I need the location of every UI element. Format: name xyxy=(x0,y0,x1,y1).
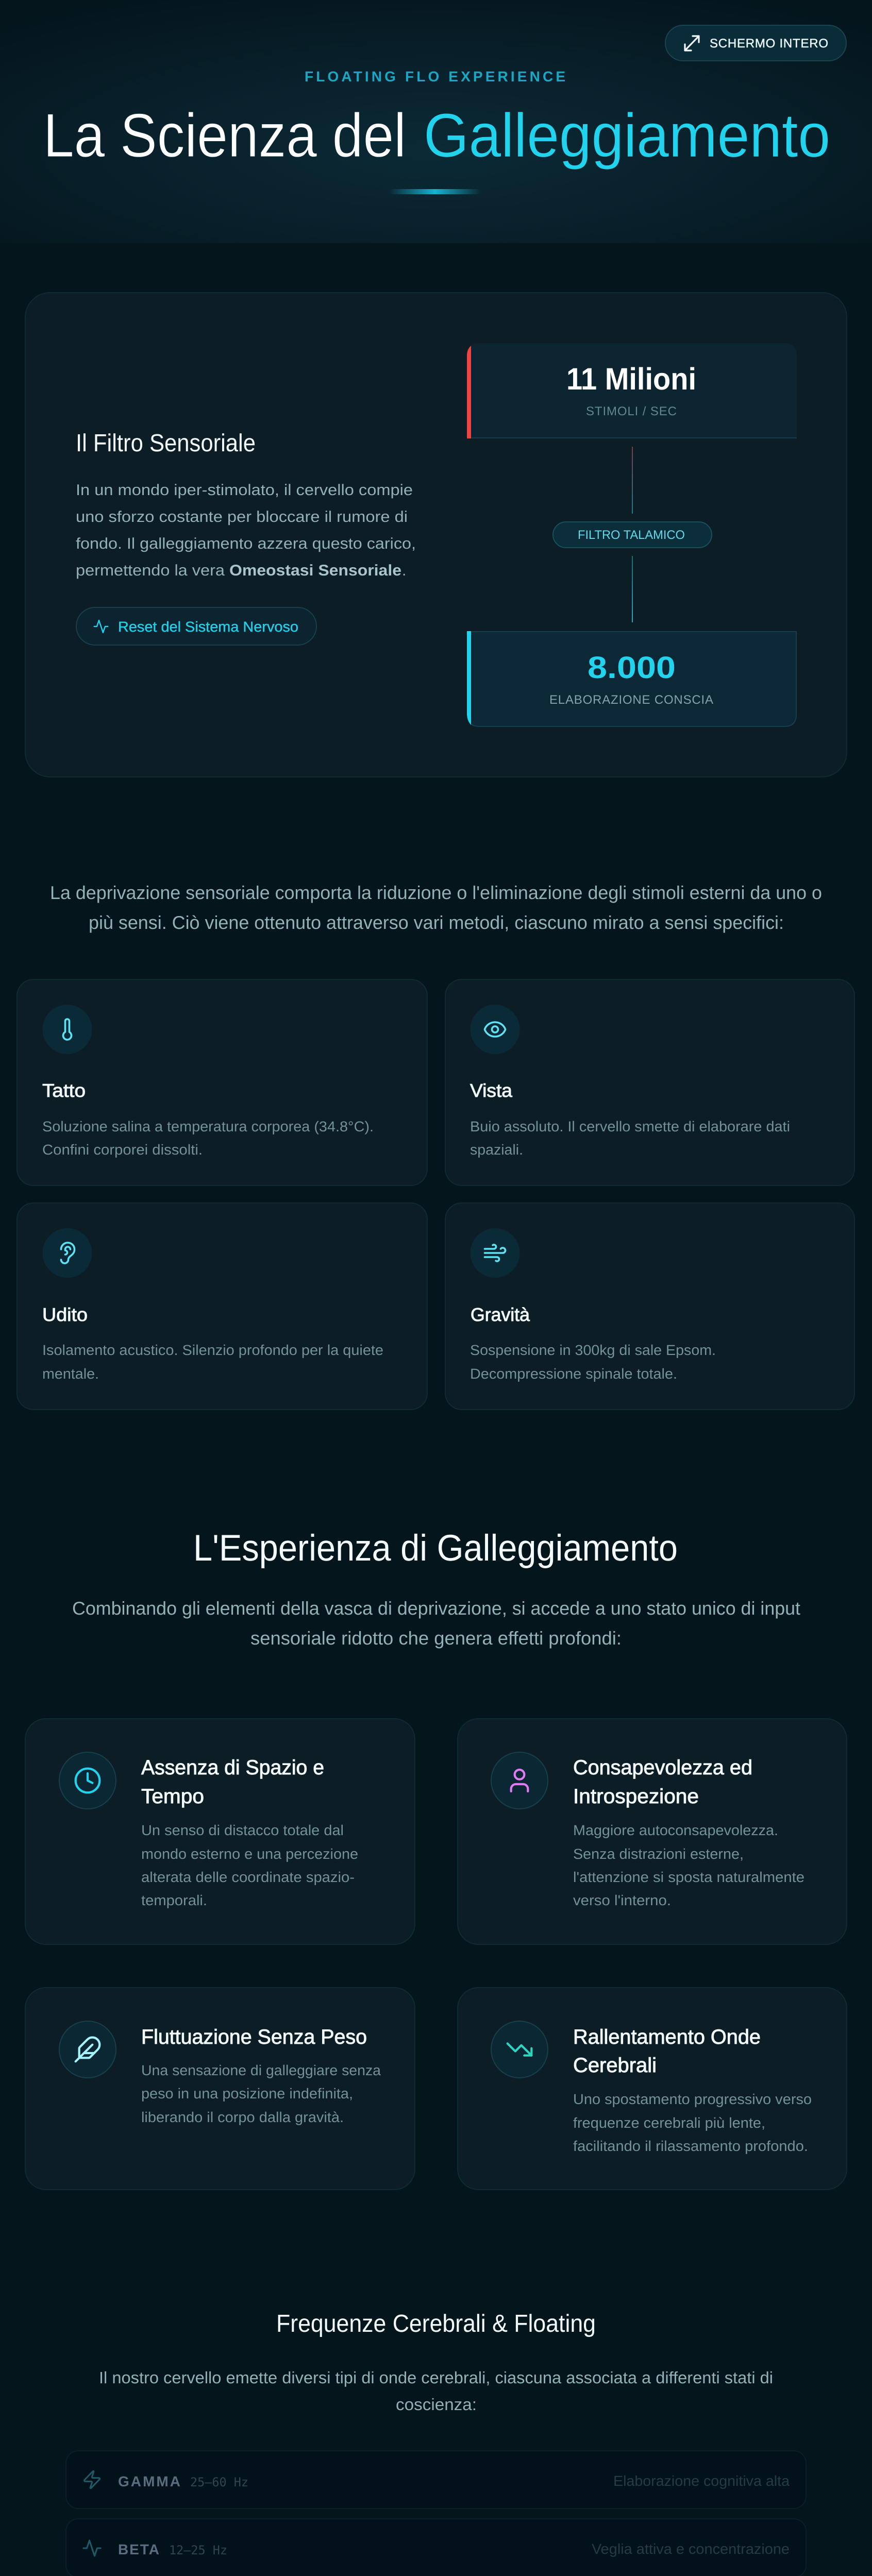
header xyxy=(0,0,872,243)
heading: spazio e tempo: Assenza di Spazio e xyxy=(141,1756,324,1779)
row: beta: 12–25 Hz xyxy=(169,2543,227,2557)
text: gravita description: Decompressione spinale totale. xyxy=(470,1366,677,1382)
text block: filter description: Omeostasi Sensoriale xyxy=(229,562,401,579)
stat box: 11 milioni xyxy=(467,343,797,438)
heading: esperienza: L'Esperienza di Galleggiamento xyxy=(193,1528,678,1569)
heading: spazio e tempo: Tempo xyxy=(141,1785,204,1808)
text block: intro: La deprivazione sensoriale comporta la riduzione o l'eliminazione degli stimoli esterni da uno o xyxy=(50,882,822,903)
icon: user xyxy=(511,1770,528,1791)
text: spazio e tempo description: alterata delle coordinate spazio- xyxy=(141,1869,355,1885)
text: consapevolezza description: Senza distrazioni esterne, xyxy=(573,1846,744,1862)
row: gamma: GAMMA xyxy=(118,2473,180,2489)
button: fullscreen xyxy=(665,25,846,61)
heading: rallentamento xyxy=(573,2026,761,2077)
text: vista description: spaziali. xyxy=(470,1142,523,1158)
row: beta xyxy=(66,2519,806,2576)
panel: spazio e tempo xyxy=(25,1719,415,1944)
badge: reset xyxy=(76,607,316,645)
text block: filter description: In un mondo iper-stimolato, il cervello compie xyxy=(76,482,413,499)
icon: zap xyxy=(84,2471,100,2488)
text: udito description xyxy=(42,1342,383,1382)
panel: rallentamento xyxy=(458,1988,847,2190)
text block: esperienza intro: sensoriale ridotto che genera effetti profondi: xyxy=(250,1628,622,1649)
heading: tatto: Tatto xyxy=(42,1080,86,1101)
title xyxy=(43,101,830,170)
eyebrow: FLOATING FLO EXPERIENCE xyxy=(305,69,565,84)
row: beta: Veglia attiva e concentrazione xyxy=(592,2541,790,2557)
connector line bottom xyxy=(632,556,633,622)
row: beta: BETA xyxy=(118,2541,159,2557)
text: gravita description xyxy=(470,1342,716,1382)
row: gamma: 25–60 Hz xyxy=(190,2475,248,2489)
stat box: 8.000: ELABORAZIONE CONSCIA xyxy=(549,693,713,707)
heading: rallentamento: Cerebrali xyxy=(573,2054,657,2077)
panel: vista xyxy=(445,979,854,1185)
heading: fluttuazione: Fluttuazione Senza Peso xyxy=(141,2026,367,2048)
badge: thalamic filter: FILTRO TALAMICO xyxy=(578,528,685,542)
heading: vista: Vista xyxy=(470,1080,513,1101)
heading: consapevolezza: Introspezione xyxy=(573,1785,699,1808)
heading: gravita: Gravità xyxy=(471,1304,530,1325)
stat box: 11 milioni: STIMOLI / SEC xyxy=(586,404,677,418)
text: spazio e tempo description: Un senso di distacco totale dal xyxy=(141,1822,344,1838)
text block: filter description xyxy=(76,482,416,579)
panel: sensory filter xyxy=(25,293,847,777)
panel: fluttuazione xyxy=(25,1988,415,2190)
text: rallentamento description: Uno spostamento progressivo verso xyxy=(573,2091,812,2107)
text block: frequenze intro xyxy=(99,2368,773,2414)
text: spazio e tempo description: mondo esterno e una percezione xyxy=(141,1846,358,1862)
title: La Scienza del xyxy=(43,101,406,170)
heading: udito: Udito xyxy=(42,1304,88,1325)
panel: gravita xyxy=(445,1203,854,1410)
icon: feather xyxy=(76,2038,99,2061)
text: fluttuazione description: peso in una posizione indefinita, xyxy=(141,2086,353,2102)
text: fluttuazione description xyxy=(141,2062,381,2125)
text block: filter description: fondo. Il galleggiamento azzera questo carico, xyxy=(76,535,416,552)
heading: frequenze: Frequenze Cerebrali & Floating xyxy=(276,2310,596,2337)
text: consapevolezza description: verso l'interno. xyxy=(573,1892,671,1908)
text block: esperienza intro: Combinando gli elementi della vasca di deprivazione, si accede a uno stato unico di input xyxy=(72,1598,800,1619)
text: consapevolezza description: Maggiore autoconsapevolezza. xyxy=(573,1822,778,1838)
text: vista description xyxy=(470,1118,790,1158)
row: gamma: Elaborazione cognitiva alta xyxy=(613,2473,790,2489)
text: rallentamento description xyxy=(573,2091,812,2154)
panel: tatto xyxy=(17,979,427,1185)
text: tatto description: Soluzione salina a temperatura corporea (34.8°C). xyxy=(42,1118,374,1134)
badge: reset: Reset del Sistema Nervoso xyxy=(118,619,298,635)
text block: intro xyxy=(50,882,822,933)
title: Galleggiamento xyxy=(424,101,830,170)
text: spazio e tempo description: temporali. xyxy=(141,1892,207,1908)
text: udito description: Isolamento acustico. Silenzio profondo per la quiete xyxy=(42,1342,383,1358)
heading: rallentamento: Rallentamento Onde xyxy=(573,2026,761,2048)
text: tatto description: Confini corporei dissolti. xyxy=(42,1142,203,1158)
stat box: 11 milioni: 11 Milioni xyxy=(566,362,696,396)
text: tatto description xyxy=(42,1118,374,1158)
text block: intro: più sensi. Ciò viene ottenuto attraverso vari metodi, ciascuno mirato a sensi specifici: xyxy=(89,912,784,933)
icon: wind xyxy=(484,1245,505,1261)
heading: filter: Il Filtro Sensoriale xyxy=(76,430,256,457)
stat box: 8.000 xyxy=(467,631,796,726)
text: consapevolezza description: l'attenzione si sposta naturalmente xyxy=(573,1869,804,1885)
text: fluttuazione description: liberando il corpo dalla gravità. xyxy=(141,2109,344,2125)
text: spazio e tempo description xyxy=(141,1822,358,1908)
icon: trending down xyxy=(508,2043,531,2056)
heading: consapevolezza: Consapevolezza ed xyxy=(573,1756,752,1779)
icon: clock xyxy=(76,1769,99,1792)
panel: udito xyxy=(17,1203,427,1410)
stat box: 8.000: 8.000 xyxy=(588,650,676,685)
text: rallentamento description: facilitando il rilassamento profondo. xyxy=(573,2138,808,2154)
title divider xyxy=(389,189,481,194)
icon: thermometer xyxy=(63,1019,71,1040)
text: gravita description: Sospensione in 300kg di sale Epsom. xyxy=(470,1342,716,1358)
text block: filter description: uno sforzo costante per bloccare il rumore di xyxy=(76,509,408,526)
text: fluttuazione description: Una sensazione di galleggiare senza xyxy=(141,2062,381,2078)
connector line top xyxy=(632,447,633,514)
text: consapevolezza description xyxy=(573,1822,804,1908)
button: fullscreen: SCHERMO INTERO xyxy=(710,37,828,50)
text block: filter description: . xyxy=(402,562,406,579)
badge: thalamic filter xyxy=(553,522,712,548)
heading: consapevolezza xyxy=(573,1756,752,1808)
heading: spazio e tempo xyxy=(141,1756,324,1808)
row: gamma xyxy=(66,2451,806,2509)
text block: esperienza intro xyxy=(72,1598,800,1649)
icon: ear xyxy=(61,1243,74,1263)
text: udito description: mentale. xyxy=(42,1366,99,1382)
text block: frequenze intro: Il nostro cervello emette diversi tipi di onde cerebrali, ciascuna associata a differenti stati di xyxy=(99,2368,773,2387)
text: vista description: Buio assoluto. Il cervello smette di elaborare dati xyxy=(470,1118,790,1134)
text block: filter description: permettendo la vera xyxy=(76,562,225,579)
icon: activity xyxy=(83,2540,100,2556)
icon: eye xyxy=(484,1022,506,1037)
text: rallentamento description: frequenze cerebrali più lente, xyxy=(573,2115,765,2131)
panel: consapevolezza xyxy=(458,1719,847,1944)
text block: frequenze intro: coscienza: xyxy=(396,2395,477,2414)
